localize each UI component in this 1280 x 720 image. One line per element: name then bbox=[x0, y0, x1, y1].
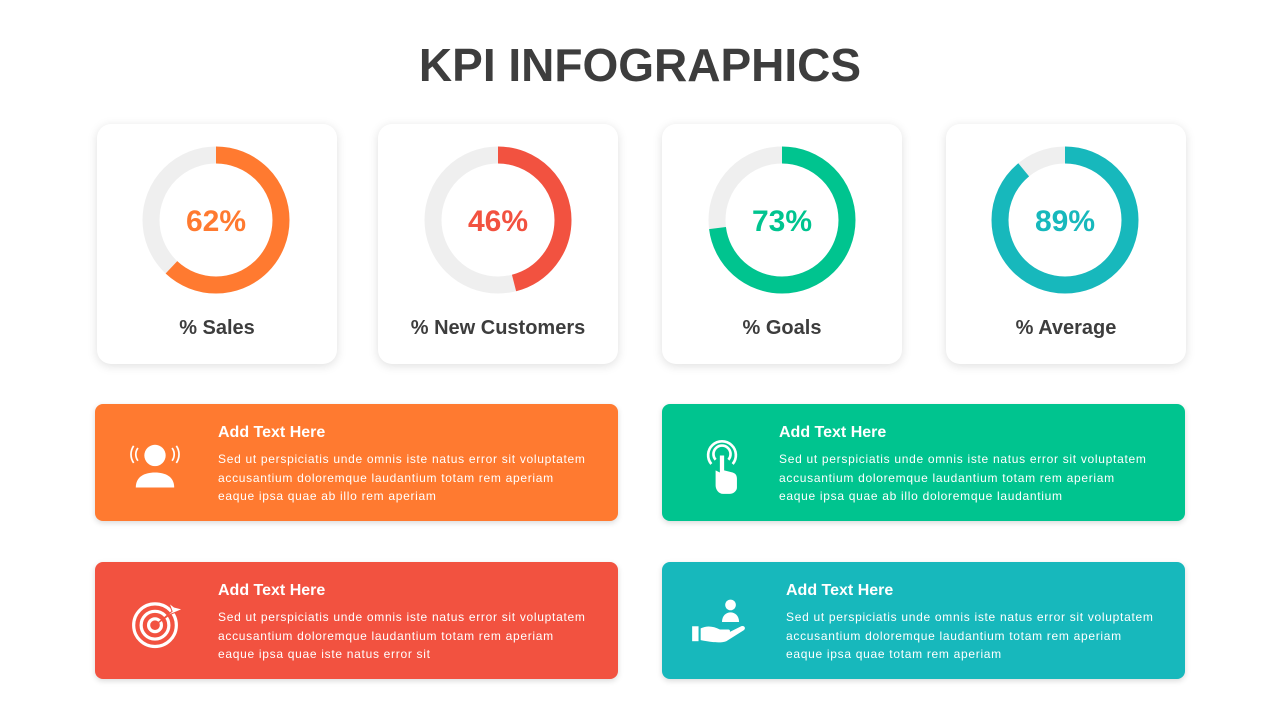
icon: touch hand bbox=[706, 440, 738, 494]
panel: average donut bbox=[946, 124, 1186, 364]
text box: green: Sed ut perspiciatis unde omnis iste natus error sit voluptatem bbox=[779, 452, 1147, 466]
text box: orange: Add Text Here bbox=[218, 424, 325, 441]
icon: target bbox=[132, 602, 181, 648]
title: KPI INFOGRAPHICS bbox=[419, 39, 861, 91]
text box: orange: Sed ut perspiciatis unde omnis iste natus error sit voluptatem bbox=[218, 452, 586, 466]
text box: red: Add Text Here bbox=[218, 582, 325, 599]
text box: green: accusantium doloremque laudantium totam rem aperiam bbox=[779, 470, 1115, 484]
panel: goals donut bbox=[662, 124, 902, 364]
text box: green: Add Text Here bbox=[779, 424, 886, 441]
text box: orange: eaque ipsa quae ab illo rem aperiam bbox=[218, 489, 437, 503]
text box: red: Sed ut perspiciatis unde omnis iste natus error sit voluptatem bbox=[218, 610, 586, 624]
text box: orange: accusantium doloremque laudantium totam rem aperiam bbox=[218, 470, 554, 484]
panel: sales donut: % Sales bbox=[179, 317, 255, 339]
text box: green bbox=[662, 404, 1185, 521]
text box: green: eaque ipsa quae ab illo doloremque laudantium bbox=[779, 489, 1063, 503]
panel: goals donut: % Goals bbox=[743, 317, 821, 339]
text box: red: accusantium doloremque laudantium totam rem aperiam bbox=[218, 628, 554, 642]
panel: average donut: 89% bbox=[1035, 205, 1095, 238]
text box: teal: eaque ipsa quae totam rem aperiam bbox=[786, 647, 1002, 661]
text box: red: eaque ipsa quae iste natus error sit bbox=[218, 647, 431, 661]
panel: sales donut bbox=[97, 124, 337, 364]
panel: goals donut: 73% bbox=[752, 205, 812, 238]
text box: teal: Add Text Here bbox=[786, 582, 893, 599]
panel: new customers donut bbox=[378, 124, 618, 364]
text box: teal: accusantium doloremque laudantium totam rem aperiam bbox=[786, 628, 1122, 642]
text box: teal: Sed ut perspiciatis unde omnis iste natus error sit voluptatem bbox=[786, 610, 1154, 624]
panel: new customers donut: 46% bbox=[468, 205, 528, 238]
text box: orange bbox=[95, 404, 618, 521]
panel: average donut: % Average bbox=[1016, 317, 1116, 339]
text box: red bbox=[95, 562, 618, 679]
text box: teal bbox=[662, 562, 1185, 679]
icon: person with sound bbox=[130, 444, 180, 488]
panel: sales donut: 62% bbox=[186, 205, 246, 238]
panel: new customers donut: % New Customers bbox=[411, 317, 585, 339]
icon: hand holding person bbox=[692, 600, 745, 642]
